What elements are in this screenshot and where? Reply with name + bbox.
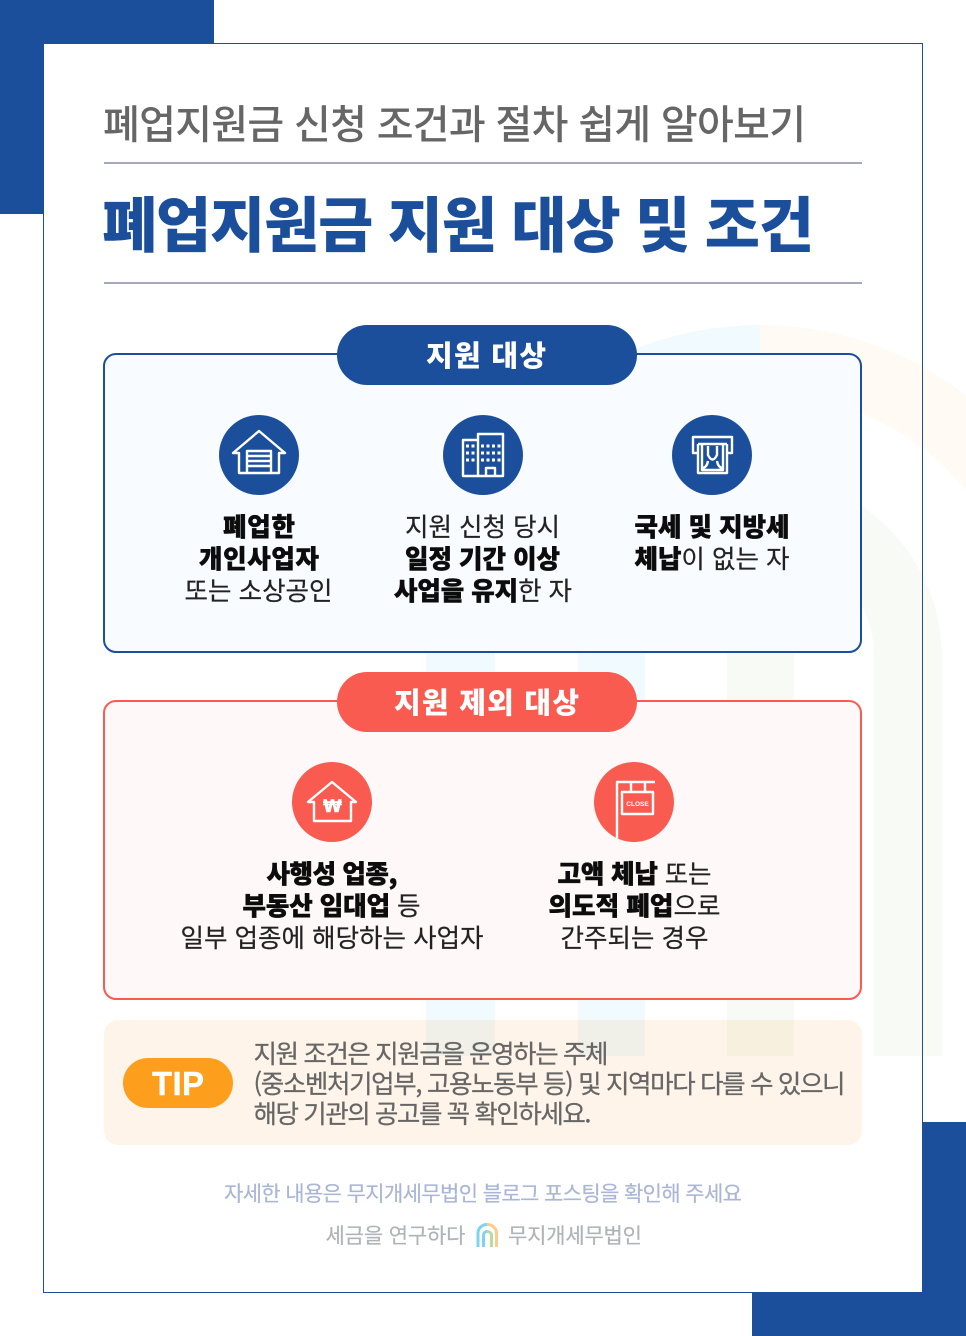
text: closed individual business — [184, 507, 332, 608]
text: closed individual business: 개인사업자 — [199, 539, 320, 576]
text: business kept for a period: 사업을 유지한 자 — [394, 571, 572, 608]
text: large arrears or intentional closure — [548, 854, 720, 955]
text: large arrears or intentional closure: 의도적 폐업으로 — [548, 886, 720, 923]
main title: 폐업지원금 지원 대상 및 조건 — [102, 178, 814, 265]
icon: house with won sign — [292, 762, 372, 842]
tip text: (중소벤처기업부, 고용노동부 등) 및 지역마다 다를 수 있으니 — [254, 1064, 846, 1101]
heading pill: excluded targets: 지원 제외 대상 — [394, 680, 579, 722]
text: large arrears or intentional closure: 고액 체납 또는 — [558, 854, 712, 891]
text: business kept for a period — [394, 507, 572, 608]
text: large arrears or intentional closure: 간주되는 경우 — [560, 918, 708, 955]
icon: house with won sign: ₩ — [323, 797, 342, 817]
text: no tax arrears: 체납이 없는 자 — [634, 539, 790, 576]
tip badge: TIP — [152, 1065, 204, 1102]
text: no tax arrears: 국세 및 지방세 — [634, 507, 790, 544]
corner block: bottom right — [752, 1122, 966, 1336]
footer note: 자세한 내용은 무지개세무법인 블로그 포스팅을 확인해 주세요 — [224, 1178, 742, 1208]
corner block: top left — [0, 0, 214, 214]
text: speculative and rental businesses: 일부 업종에 해당하는 사업자 — [180, 918, 484, 955]
text: no tax arrears — [634, 507, 790, 576]
heading pill: support targets: 지원 대상 — [426, 333, 546, 375]
text: closed individual business: 또는 소상공인 — [184, 571, 332, 608]
subtitle: 폐업지원금 신청 조건과 절차 쉽게 알아보기 — [103, 92, 806, 150]
text: business kept for a period: 일정 기간 이상 — [405, 539, 560, 576]
footer brand — [326, 1220, 642, 1250]
panel: tip — [104, 1020, 862, 1145]
tip text: 지원 조건은 지원금을 운영하는 주체 — [254, 1034, 608, 1071]
icon: cash machine — [672, 415, 752, 495]
tip text: 해당 기관의 공고를 꼭 확인하세요. — [254, 1094, 592, 1131]
footer brand: 세금을 연구하다 — [326, 1220, 466, 1250]
text: speculative and rental businesses: 사행성 업종, — [266, 854, 398, 891]
footer brand: 무지개세무법인 — [508, 1220, 642, 1250]
heading pill: support targets — [337, 325, 637, 385]
icon: rainbow logo — [478, 1224, 496, 1247]
text: business kept for a period: 지원 신청 당시 — [405, 507, 560, 544]
panel: excluded targets — [104, 672, 861, 999]
text: speculative and rental businesses — [180, 854, 484, 955]
icon: closed sign: CLOSE — [626, 801, 649, 808]
heading pill: excluded targets — [337, 672, 637, 732]
text: speculative and rental businesses: 부동산 임대업 등 — [242, 886, 420, 923]
frame right line over watermark — [922, 44, 924, 1122]
icon: garage house — [219, 415, 299, 495]
icon: office buildings — [443, 415, 523, 495]
tip badge — [123, 1058, 233, 1108]
text: closed individual business: 폐업한 — [223, 507, 295, 544]
watermark: rainbow arch logo — [426, 325, 966, 1056]
panel: support targets — [104, 325, 861, 652]
tip text — [254, 1034, 846, 1131]
icon: closed sign — [594, 762, 674, 845]
